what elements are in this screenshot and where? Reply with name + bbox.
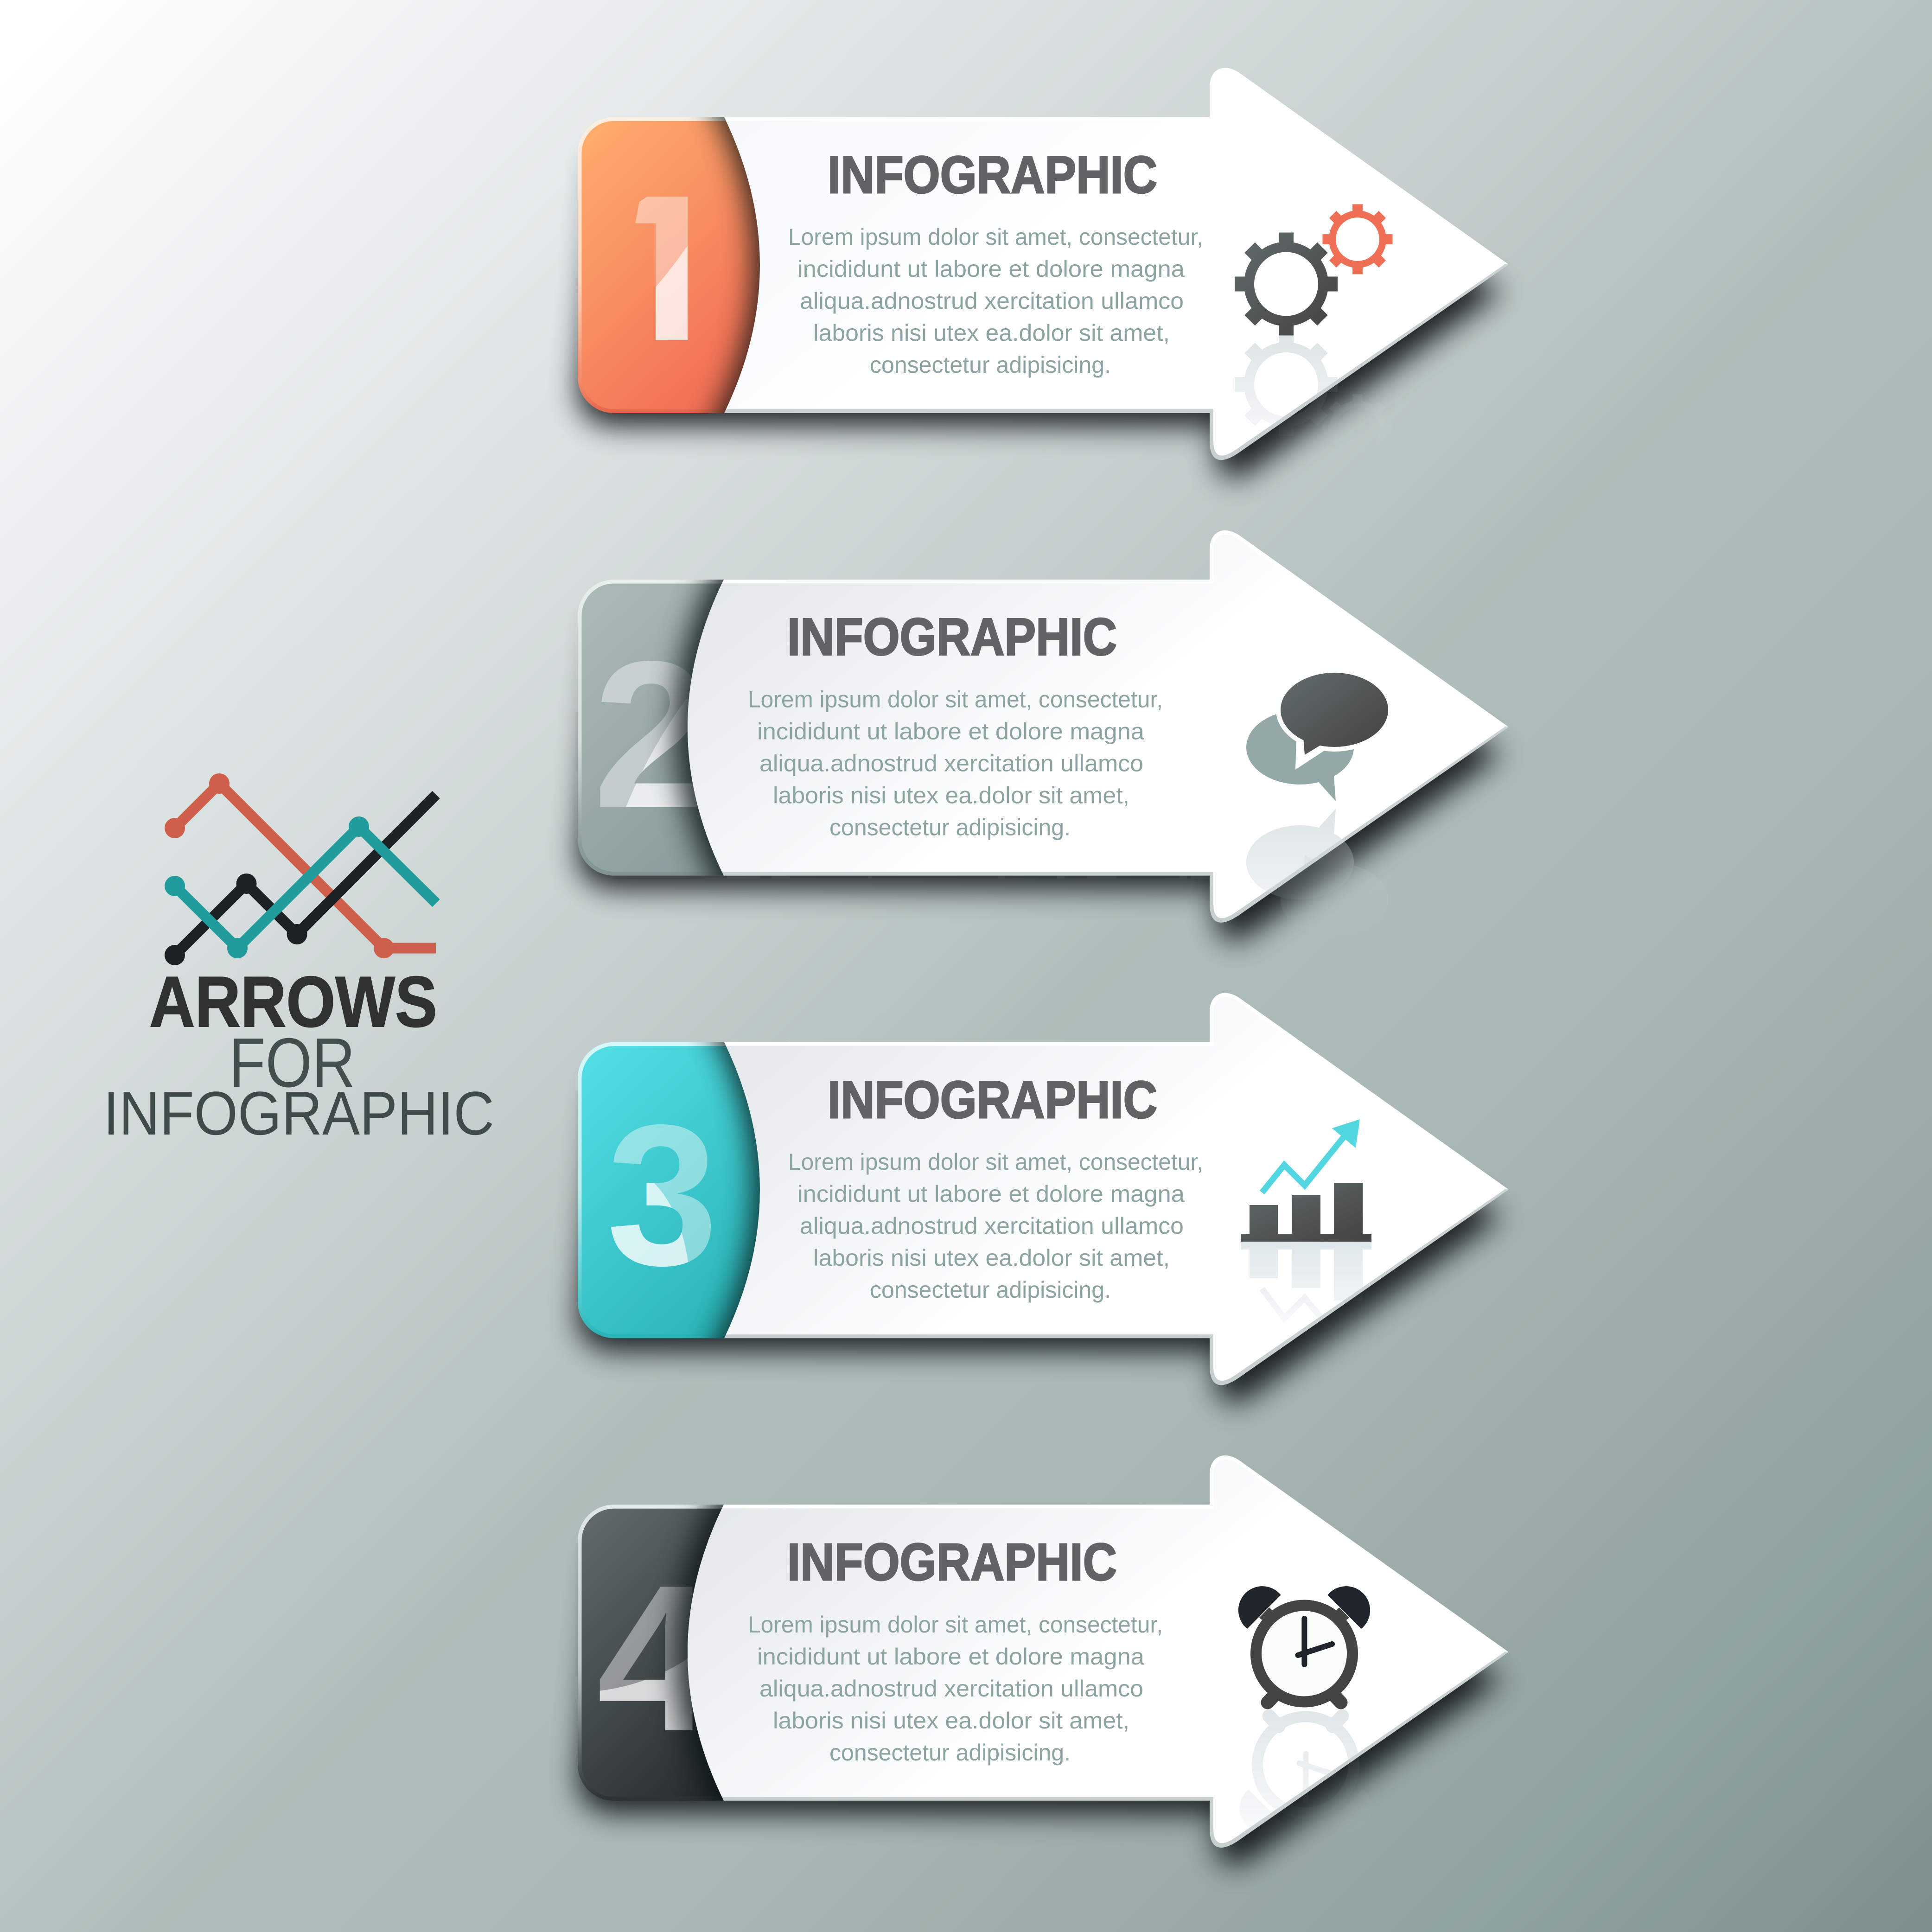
card 3 drop shadow — [578, 1083, 1502, 1403]
icon reflection: alarm clock — [1240, 1716, 1371, 1832]
arrow shade on tab 3 — [684, 971, 974, 1412]
clock feet — [1268, 1692, 1341, 1702]
panel: arrow card 4 — [578, 1434, 1509, 1875]
black line — [165, 795, 436, 965]
card 2 drop shadow — [578, 620, 1502, 941]
bubble halo — [1276, 668, 1393, 770]
icon reflection: gears — [1235, 333, 1392, 464]
body text 4: consectetur adipisicing. — [829, 1740, 1071, 1766]
body text 3: incididunt ut labore et dolore magna — [797, 1181, 1185, 1207]
logo word: for: FOR — [229, 1023, 355, 1102]
title 3: INFOGRAPHIC — [828, 1071, 1157, 1129]
arrow shade on tab 2 — [675, 509, 974, 950]
body text 1: aliqua.adnostrud xercitation ullamco — [800, 288, 1184, 314]
body text 3: laboris nisi utex ea.dolor sit amet, — [813, 1245, 1170, 1271]
panel: arrow card 3 — [578, 971, 1509, 1412]
body text 2: consectetur adipisicing. — [829, 815, 1071, 841]
number 4: 4 — [597, 1542, 714, 1775]
logo word: arrows: ARROWS — [149, 962, 437, 1042]
body text 2: incididunt ut labore et dolore magna — [757, 719, 1144, 745]
body text 2: laboris nisi utex ea.dolor sit amet, — [773, 783, 1129, 809]
body text 3: Lorem ipsum dolor sit amet, consectetur, — [788, 1149, 1203, 1175]
tab 4 border — [578, 1505, 788, 1801]
tab 4 fill — [581, 1509, 788, 1797]
logo word: infographic: INFOGRAPHIC — [103, 1079, 494, 1148]
body text 4 — [748, 1612, 1163, 1766]
clock ring — [1256, 1605, 1352, 1702]
icon: dark speech bubble — [1281, 673, 1388, 755]
body text 3: aliqua.adnostrud xercitation ullamco — [800, 1213, 1184, 1239]
icon: bars — [1241, 1183, 1371, 1242]
body text 1: Lorem ipsum dolor sit amet, consectetur, — [788, 224, 1203, 250]
red line — [165, 773, 436, 958]
line chart logo — [165, 773, 436, 965]
body text 4: incididunt ut labore et dolore magna — [757, 1644, 1144, 1670]
tab 3 fill — [581, 1046, 788, 1334]
logo block: arrows for infographic — [103, 773, 494, 1148]
clock bells — [1238, 1586, 1370, 1629]
arrow 1 edge — [724, 68, 1509, 460]
arrow 4 edge — [688, 1455, 1509, 1848]
arrow shade on tab 4 — [675, 1434, 974, 1875]
number 2: 2 — [593, 618, 709, 852]
body text 3: consectetur adipisicing. — [870, 1277, 1111, 1303]
teal line — [165, 816, 436, 958]
card 4 drop shadow — [578, 1545, 1502, 1866]
number 4: 4 — [597, 1542, 714, 1775]
arrow 1 face — [726, 72, 1505, 456]
number 1: 1 — [618, 152, 734, 385]
title 2: INFOGRAPHIC — [787, 608, 1117, 666]
body text 2: Lorem ipsum dolor sit amet, consectetur, — [748, 687, 1163, 713]
title 1: INFOGRAPHIC — [828, 146, 1157, 204]
icon group: speech bubbles — [1246, 668, 1393, 801]
body text 2: aliqua.adnostrud xercitation ullamco — [759, 751, 1143, 777]
body text 1: laboris nisi utex ea.dolor sit amet, — [813, 320, 1170, 346]
card 1 drop shadow — [578, 158, 1502, 478]
arrow 2 edge — [688, 530, 1509, 923]
icon: rising arrow — [1262, 1119, 1360, 1192]
number 1: 1 — [618, 152, 734, 385]
body text 2 — [748, 687, 1163, 841]
clock hands — [1298, 1619, 1332, 1664]
panel: arrow card 1 — [578, 46, 1509, 487]
body text 1: consectetur adipisicing. — [870, 352, 1111, 378]
arrow 3 face — [726, 997, 1505, 1381]
number 3: 3 — [606, 1083, 718, 1307]
arrow 3 edge — [724, 993, 1509, 1385]
tab 1 fill — [581, 121, 788, 409]
body text 4: Lorem ipsum dolor sit amet, consectetur, — [748, 1612, 1163, 1638]
arrow 4 face — [688, 1460, 1505, 1843]
title 4: INFOGRAPHIC — [787, 1533, 1117, 1591]
panel: arrow card 2 — [578, 509, 1509, 950]
arrow shade on tab 1 — [684, 46, 974, 487]
body text 1 — [788, 224, 1203, 378]
icon reflection: bar chart — [1241, 1242, 1371, 1345]
tab 2 border — [578, 580, 788, 876]
icon: grey speech bubble — [1246, 710, 1354, 801]
tab 2 fill — [581, 584, 788, 872]
arrow 2 face — [688, 535, 1505, 918]
icon group: alarm clock — [1238, 1586, 1370, 1702]
clock bell connectors — [1259, 1607, 1349, 1620]
number 2: 2 — [593, 618, 709, 852]
body text 1: incididunt ut labore et dolore magna — [797, 256, 1185, 282]
body text 4: laboris nisi utex ea.dolor sit amet, — [773, 1708, 1129, 1734]
icon: gears — [1235, 204, 1392, 336]
tab 3 border — [578, 1042, 788, 1338]
icon group: bar chart — [1241, 1119, 1371, 1242]
icon reflection: speech bubbles — [1246, 809, 1388, 937]
number 1 — [635, 197, 688, 340]
body text 3 — [788, 1149, 1203, 1303]
body text 4: aliqua.adnostrud xercitation ullamco — [759, 1676, 1143, 1702]
number 3: 3 — [606, 1083, 718, 1307]
tab 1 border — [578, 117, 788, 413]
